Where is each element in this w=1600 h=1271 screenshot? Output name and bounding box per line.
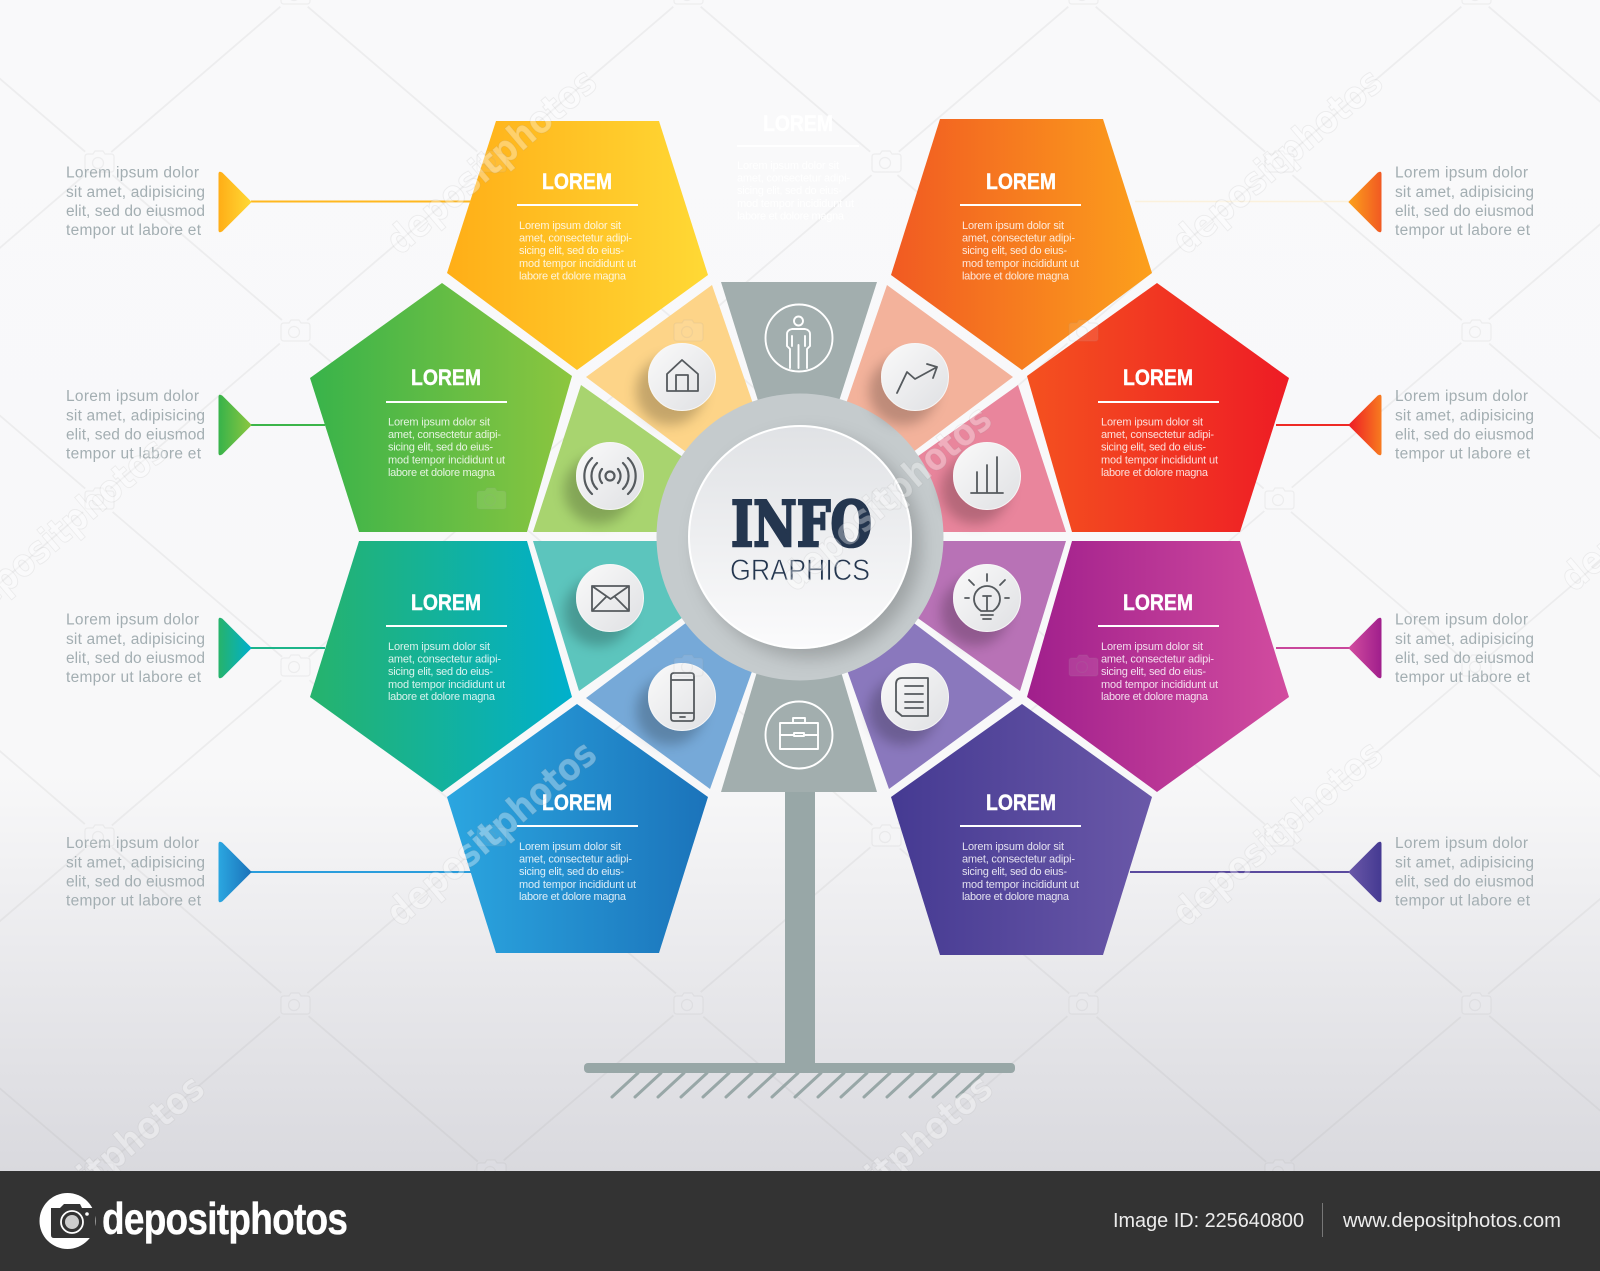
- panel: red: [1027, 283, 1289, 532]
- left callout 2: Lorem ipsum dolor: [66, 388, 199, 405]
- panel: red: Lorem ipsum dolor sit: [1101, 416, 1203, 428]
- right callout 3: elit, sed do eiusmod: [1395, 650, 1534, 667]
- ghost panel: mod tempor incididunt ut: [737, 198, 854, 210]
- panel: blue: mod tempor incididunt ut: [519, 879, 636, 891]
- panel: green: Lorem ipsum dolor sit: [388, 416, 490, 428]
- watermarks: depositphotos: [772, 396, 1000, 600]
- icon: trend arrow: [882, 344, 948, 410]
- left callout 4: [66, 835, 471, 909]
- panel: yellow: [447, 121, 708, 370]
- right callout 2: Lorem ipsum dolor: [1395, 388, 1528, 405]
- icon: home: [648, 344, 716, 410]
- center circle: [656, 394, 944, 680]
- icon: camera logo: [40, 1193, 96, 1249]
- panel: orange: sicing elit, sed do eius-: [962, 245, 1067, 257]
- icon: person: [766, 304, 832, 372]
- icon: envelope: [576, 564, 644, 632]
- left callout 2: [66, 388, 325, 462]
- left callout 4: Lorem ipsum dolor: [66, 835, 199, 852]
- watermarks: depositphotos: [1163, 59, 1391, 263]
- panel: magenta: labore et dolore magna: [1101, 691, 1209, 703]
- panel: violet: Lorem ipsum dolor sit: [962, 841, 1064, 853]
- inner wedges: [533, 282, 1066, 792]
- right callout 3: tempor ut labore et: [1395, 669, 1531, 686]
- right callout 2: [1276, 388, 1534, 462]
- watermarks: depositphotos: [1163, 731, 1391, 935]
- right callout 1: sit amet, adipisicing: [1395, 184, 1534, 201]
- panel: orange: [891, 119, 1152, 370]
- panel: green: sicing elit, sed do eius-: [388, 442, 493, 454]
- panel: blue: sicing elit, sed do eius-: [519, 866, 624, 878]
- right callout 2: tempor ut labore et: [1395, 445, 1531, 462]
- panel: red: amet, consectetur adipi-: [1101, 429, 1214, 441]
- icon: phone: [648, 664, 716, 730]
- ghost panel: labore et dolore magna: [737, 210, 845, 222]
- panel: magenta: Lorem ipsum dolor sit: [1101, 641, 1203, 653]
- title: info: INFO: [731, 487, 872, 561]
- footer bar: [0, 1171, 1600, 1271]
- icon: wifi: [576, 442, 644, 510]
- panel: yellow: amet, consectetur adipi-: [519, 232, 632, 244]
- right callout 4: [1130, 835, 1534, 909]
- panel: orange: mod tempor incididunt ut: [962, 258, 1079, 270]
- panel: magenta: mod tempor incididunt ut: [1101, 679, 1218, 691]
- right callout 2: sit amet, adipisicing: [1395, 407, 1534, 424]
- right callout 1: [1135, 165, 1534, 239]
- panel: green: labore et dolore magna: [388, 467, 496, 479]
- left callout 4: elit, sed do eiusmod: [66, 873, 205, 890]
- panel: violet: [891, 704, 1152, 955]
- left callout 2: elit, sed do eiusmod: [66, 426, 205, 443]
- panel: teal: mod tempor incididunt ut: [388, 679, 505, 691]
- left callout 3: tempor ut labore et: [66, 669, 202, 686]
- panel: violet: LOREM: [986, 790, 1056, 815]
- left callout 3: elit, sed do eiusmod: [66, 650, 205, 667]
- ghost panel: LOREM: [763, 111, 833, 136]
- panel: magenta: LOREM: [1123, 590, 1193, 615]
- right callout 3: sit amet, adipisicing: [1395, 631, 1534, 648]
- panel: teal: labore et dolore magna: [388, 691, 496, 703]
- ghost panel: [737, 111, 859, 222]
- panel: teal: Lorem ipsum dolor sit: [388, 641, 490, 653]
- panel: teal: amet, consectetur adipi-: [388, 654, 501, 666]
- panel: violet: amet, consectetur adipi-: [962, 854, 1075, 866]
- stand pole and ground: [584, 785, 1015, 1097]
- panel: orange: labore et dolore magna: [962, 270, 1070, 282]
- panel: blue: labore et dolore magna: [519, 891, 627, 903]
- panel: magenta: [1027, 541, 1289, 792]
- right callout 1: Lorem ipsum dolor: [1395, 165, 1528, 182]
- panel: green: amet, consectetur adipi-: [388, 429, 501, 441]
- left callout 2: tempor ut labore et: [66, 445, 202, 462]
- logo wordmark: depositphotos: [102, 1194, 348, 1244]
- watermarks: depositphotos: [773, 1065, 1001, 1269]
- panel: teal: [310, 541, 572, 792]
- panel: orange: Lorem ipsum dolor sit: [962, 220, 1064, 232]
- ghost panel: sicing elit, sed do eius-: [737, 185, 842, 197]
- website: www.depositphotos.com: [1342, 1210, 1561, 1232]
- panel: orange: LOREM: [986, 169, 1056, 194]
- left callout 2: sit amet, adipisicing: [66, 407, 205, 424]
- panel: yellow: Lorem ipsum dolor sit: [519, 220, 621, 232]
- watermarks: depositphotos: [377, 731, 605, 935]
- ghost panel: Lorem ipsum dolor sit: [737, 160, 839, 172]
- watermarks: depositphotos: [377, 59, 605, 263]
- right callout 4: tempor ut labore et: [1395, 892, 1531, 909]
- right callout 1: tempor ut labore et: [1395, 222, 1531, 239]
- panel: teal: LOREM: [411, 590, 481, 615]
- panel: yellow: labore et dolore magna: [519, 270, 627, 282]
- left callout 1: [66, 165, 471, 239]
- right callout 2: elit, sed do eiusmod: [1395, 426, 1534, 443]
- panel: blue: LOREM: [542, 790, 612, 815]
- icon: bar chart: [954, 442, 1020, 510]
- right callout 4: Lorem ipsum dolor: [1395, 835, 1528, 852]
- panel: red: LOREM: [1123, 365, 1193, 390]
- left callout 1: sit amet, adipisicing: [66, 184, 205, 201]
- panel: orange: amet, consectetur adipi-: [962, 232, 1075, 244]
- left callout 4: sit amet, adipisicing: [66, 854, 205, 871]
- icon: document: [882, 664, 948, 730]
- right callout 4: elit, sed do eiusmod: [1395, 873, 1534, 890]
- image id: Image ID: 225640800: [1113, 1210, 1304, 1232]
- left callout 3: Lorem ipsum dolor: [66, 612, 199, 628]
- panel: violet: mod tempor incididunt ut: [962, 879, 1079, 891]
- panel: red: mod tempor incididunt ut: [1101, 454, 1218, 466]
- left callout 3: [66, 612, 325, 686]
- panel: yellow: sicing elit, sed do eius-: [519, 245, 624, 257]
- right callout 3: Lorem ipsum dolor: [1395, 612, 1528, 628]
- left callout 1: tempor ut labore et: [66, 222, 202, 239]
- panel: blue: [447, 704, 708, 953]
- left callout 1: Lorem ipsum dolor: [66, 165, 199, 182]
- panel: magenta: sicing elit, sed do eius-: [1101, 666, 1206, 678]
- panel: green: [310, 283, 572, 532]
- right callout 4: sit amet, adipisicing: [1395, 854, 1534, 871]
- left callout 1: elit, sed do eiusmod: [66, 203, 205, 220]
- panel: yellow: mod tempor incididunt ut: [519, 258, 636, 270]
- icon: light bulb: [954, 564, 1020, 632]
- left callout 3: sit amet, adipisicing: [66, 631, 205, 648]
- panel: violet: labore et dolore magna: [962, 891, 1070, 903]
- panel: magenta: amet, consectetur adipi-: [1101, 654, 1214, 666]
- panel: blue: amet, consectetur adipi-: [519, 854, 632, 866]
- icon: briefcase: [766, 702, 832, 768]
- right callout 1: elit, sed do eiusmod: [1395, 203, 1534, 220]
- right callout 3: [1276, 612, 1534, 686]
- panel: blue: Lorem ipsum dolor sit: [519, 841, 621, 853]
- ghost panel: amet, consectetur adipi-: [737, 172, 850, 184]
- left callout 4: tempor ut labore et: [66, 892, 202, 909]
- panel: green: mod tempor incididunt ut: [388, 454, 505, 466]
- panel: teal: sicing elit, sed do eius-: [388, 666, 493, 678]
- panel: red: sicing elit, sed do eius-: [1101, 442, 1206, 454]
- panel: violet: sicing elit, sed do eius-: [962, 866, 1067, 878]
- panel: yellow: LOREM: [542, 169, 612, 194]
- title: graphics: GRAPHICS: [730, 554, 870, 587]
- panel: red: labore et dolore magna: [1101, 467, 1209, 479]
- panel: green: LOREM: [411, 365, 481, 390]
